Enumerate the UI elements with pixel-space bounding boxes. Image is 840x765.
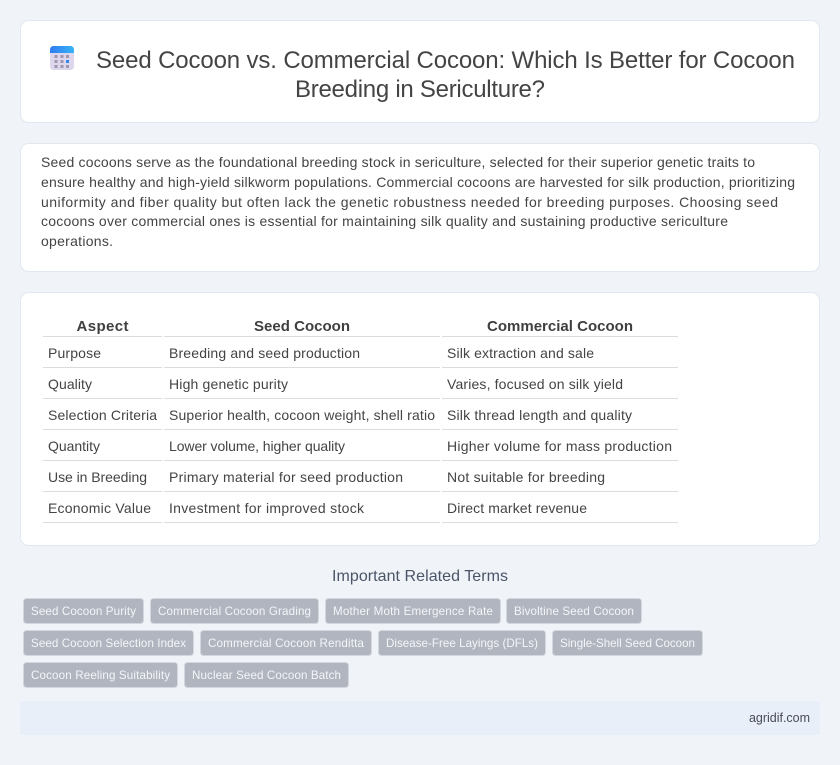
tag: [200, 630, 372, 656]
intro text: Seed cocoons serve as the foundational breeding stock in sericulture, selected for their superior genetic traits to: [41, 154, 755, 170]
intro text: [41, 154, 795, 249]
row: purpose: Purpose: [48, 345, 101, 361]
row: quantity: Higher volume for mass production: [447, 438, 672, 454]
row: quality: [48, 376, 623, 392]
table header: Seed Cocoon: [254, 318, 350, 335]
tag: Single-Shell Seed Cocoon: [560, 637, 695, 650]
tag: Mother Moth Emergence Rate: [333, 605, 493, 618]
row: quantity: Quantity: [48, 438, 100, 454]
tag: Commercial Cocoon Renditta: [208, 637, 365, 650]
row: use in breeding: [48, 469, 605, 485]
tag: [552, 630, 702, 656]
tag: [506, 598, 642, 624]
tag: [24, 630, 194, 656]
row: selection criteria: Superior health, cocoon weight, shell ratio: [169, 407, 435, 423]
row: economic value: Direct market revenue: [447, 500, 587, 516]
row: quality: Quality: [48, 376, 92, 392]
footer source text: agridif.com: [749, 711, 810, 725]
tag: Nuclear Seed Cocoon Batch: [192, 669, 341, 682]
row: economic value: [48, 500, 587, 516]
tag: [378, 630, 546, 656]
row: quality: Varies, focused on silk yield: [447, 376, 623, 392]
related terms heading: Important Related Terms: [332, 568, 508, 585]
title panel: [20, 20, 820, 122]
tag: Seed Cocoon Purity: [31, 605, 136, 618]
intro text: uniformity and fiber quality but often lack the genetic robustness needed for breeding purposes. Choosing seed: [41, 194, 778, 210]
row: economic value: Economic Value: [48, 500, 151, 516]
table header: Commercial Cocoon: [487, 318, 633, 335]
related term tags: [24, 598, 702, 688]
tag: Commercial Cocoon Grading: [158, 605, 311, 618]
tag: Disease-Free Layings (DFLs): [386, 637, 538, 650]
tag: [24, 662, 178, 688]
tag: [24, 598, 144, 624]
title: Seed Cocoon vs. Commercial Cocoon: Which Is Better for Cocoon: [96, 47, 795, 74]
icon: calendar: [50, 46, 74, 70]
row: purpose: Breeding and seed production: [169, 345, 360, 361]
table header: [76, 318, 633, 335]
row: purpose: [48, 345, 594, 361]
tag: Cocoon Reeling Suitability: [31, 669, 170, 682]
row: quantity: Lower volume, higher quality: [169, 438, 345, 454]
tag: [184, 662, 348, 688]
row: economic value: Investment for improved stock: [169, 500, 365, 516]
row: quantity: [48, 438, 672, 454]
intro text: operations.: [41, 233, 113, 249]
title: [96, 47, 795, 103]
tag: Bivoltine Seed Cocoon: [514, 605, 634, 618]
row: use in breeding: Use in Breeding: [48, 469, 147, 485]
tag: [150, 598, 318, 624]
intro text: cocoons over commercial ones is essential for maintaining silk quality and sustaining productive sericulture: [41, 213, 728, 229]
intro panel: [20, 144, 820, 272]
table header: Aspect: [76, 318, 128, 335]
row: use in breeding: Primary material for seed production: [169, 469, 403, 485]
title: Breeding in Sericulture?: [295, 76, 545, 103]
row: purpose: Silk extraction and sale: [447, 345, 594, 361]
intro text: ensure healthy and high-yield silkworm populations. Commercial cocoons are harvested for silk production, prioritizing: [41, 174, 795, 190]
row: use in breeding: Not suitable for breeding: [447, 469, 605, 485]
footer: [20, 701, 820, 735]
table panel: [20, 292, 820, 546]
row: selection criteria: Selection Criteria: [48, 407, 157, 423]
row: selection criteria: [48, 407, 632, 423]
tag: Seed Cocoon Selection Index: [31, 637, 186, 650]
row: selection criteria: Silk thread length and quality: [447, 407, 632, 423]
row: quality: High genetic purity: [169, 376, 288, 392]
tag: [326, 598, 500, 624]
